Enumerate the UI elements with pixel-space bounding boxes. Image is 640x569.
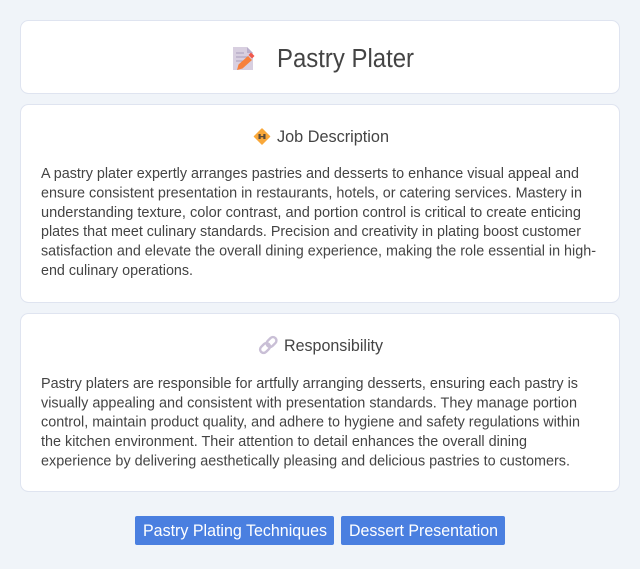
tag: pastry plating techniques: Pastry Plating Techniques: [143, 522, 327, 540]
text: responsibility body: control, maintain product quality, and adhere to hygiene and safety regulations within: [41, 415, 580, 431]
panel: job description: [20, 104, 620, 302]
tag: pastry plating techniques: [135, 516, 334, 545]
text: responsibility body: Pastry platers are responsible for artfully arranging desserts, ensuring each pastry is: [41, 376, 578, 392]
title text: Pastry Plater: [277, 45, 414, 73]
icon: orange diamond sign: [254, 129, 270, 144]
text: job description body: [41, 166, 596, 279]
icon: chain link: [259, 336, 278, 354]
text: job description body: A pastry plater expertly arranges pastries and desserts to enhance visual appeal and: [41, 166, 579, 182]
text: job description body: end culinary operations.: [41, 263, 193, 279]
text: responsibility body: [41, 376, 580, 469]
text: job description body: plates that meet culinary standards. Precision and creativity in plating boost customer: [41, 224, 581, 240]
heading: responsibility: Responsibility: [284, 336, 383, 355]
text: responsibility body: experience by delivering aesthetically pleasing and delicious pastries to customers.: [41, 453, 570, 469]
text: responsibility body: the kitchen environment. Their attention to detail enhances the overall dining: [41, 434, 527, 450]
panel: title: [20, 20, 620, 94]
icon: document with pencil: [233, 47, 254, 70]
tag: dessert presentation: Dessert Presentation: [349, 522, 498, 540]
text: job description body: satisfaction and elevate the overall dining experience, making the role essential in high-: [41, 244, 596, 260]
text: responsibility body: visually appealing and consistent with presentation standards. They manage portion: [41, 395, 577, 411]
tag: dessert presentation: [341, 516, 505, 545]
text: job description body: ensure consistent presentation in restaurants, hotels, or catering services. Mastery in: [41, 185, 582, 201]
panel: responsibility: [20, 314, 620, 492]
heading: job description: Job Description: [277, 127, 389, 146]
text: job description body: understanding texture, color contrast, and portion control is critical to create enticing: [41, 205, 581, 221]
